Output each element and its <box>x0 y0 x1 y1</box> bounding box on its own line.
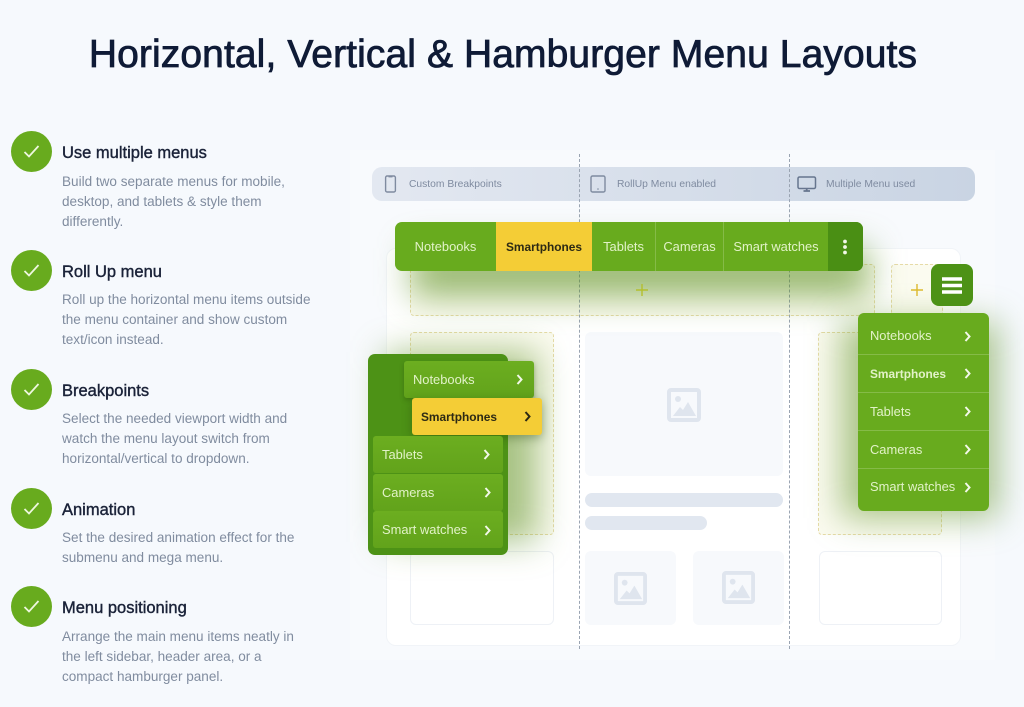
icon: small header plus <box>911 284 923 296</box>
icon: hamburger <box>942 277 962 294</box>
dropdown item: tablets: Tablets <box>870 404 911 419</box>
text: menu positioning: Arrange the main menu items neatly in <box>62 629 294 644</box>
card: bottom right empty <box>819 551 942 625</box>
icon: chevron <box>484 487 491 498</box>
icon: chevron <box>964 368 971 379</box>
title: Horizontal, Vertical & Hamburger Menu Layouts <box>89 33 917 76</box>
heading: roll up menu: Roll Up menu <box>62 263 162 281</box>
dropdown menu <box>858 313 989 511</box>
text: animation: submenu and mega menu. <box>62 550 223 565</box>
icon: monitor <box>797 176 816 192</box>
text: menu positioning: the left sidebar, header area, or a <box>62 649 262 664</box>
sidebar item: smart watches <box>373 511 503 548</box>
menu item: smartphones active: Smartphones <box>506 240 582 254</box>
heading: breakpoints: Breakpoints <box>62 382 149 400</box>
heading: animation: Animation <box>62 501 135 519</box>
text: use multiple menus <box>62 174 285 229</box>
heading: use multiple menus: Use multiple menus <box>62 144 207 162</box>
label: multiple menu used: Multiple Menu used <box>826 179 915 190</box>
menu item: smartphones active <box>496 222 592 271</box>
dropdown item: notebooks <box>858 313 989 355</box>
text: menu positioning <box>62 629 294 684</box>
icon: chevron <box>484 449 490 460</box>
shadow: horizontal menu <box>412 248 868 296</box>
icon: chevron <box>524 411 531 422</box>
dropdown item: cameras: Cameras <box>870 442 922 457</box>
card: image placeholder two <box>693 551 784 625</box>
text: roll up menu: Roll up the horizontal menu items outside <box>62 292 310 307</box>
text: animation: Set the desired animation effect for the <box>62 530 294 545</box>
sidebar item: notebooks: Notebooks <box>413 372 475 387</box>
sidebar item: tablets <box>373 436 503 473</box>
menu item: smart watches: Smart watches <box>733 239 819 254</box>
zone: right sidebar drop area <box>818 332 942 535</box>
sidebar item: smartphones active <box>412 398 542 435</box>
icon: image <box>722 571 755 604</box>
dropdown item: tablets <box>858 393 989 431</box>
icon: check circle <box>11 369 52 410</box>
menu item: notebooks: Notebooks <box>415 239 476 254</box>
breakpoint divider right <box>789 154 790 649</box>
text: roll up menu: the menu container and show custom <box>62 312 287 327</box>
icon: chevron <box>964 444 971 455</box>
zone: left sidebar drop area <box>410 332 554 535</box>
text: menu positioning: compact hamburger panel. <box>62 669 223 684</box>
panel: page wireframe <box>386 248 961 646</box>
zone: small header drop area <box>891 264 943 316</box>
menu item: smart watches <box>723 222 828 271</box>
icon: check circle <box>11 488 52 529</box>
feature: roll up menu <box>11 250 310 347</box>
label: rollup menu enabled: RollUp Menu enabled <box>617 179 716 190</box>
hamburger button <box>931 264 973 306</box>
icon: header plus <box>636 284 648 296</box>
shadow: dropdown menu <box>842 322 998 518</box>
icon: tablet <box>590 175 606 193</box>
icon: chevron <box>964 482 971 493</box>
feature: use multiple menus <box>11 131 285 229</box>
icon: chevron <box>964 406 971 417</box>
icon: phone <box>384 175 396 193</box>
icon: check circle <box>11 131 52 172</box>
icon: chevron <box>964 331 971 342</box>
dropdown item: notebooks: Notebooks <box>870 328 932 343</box>
sidebar item: tablets: Tablets <box>382 447 423 462</box>
dropdown item: smartphones: Smartphones <box>870 366 946 380</box>
icon: image <box>614 572 647 605</box>
text: breakpoints: Select the needed viewport width and <box>62 411 287 426</box>
text line placeholder long <box>585 493 783 507</box>
heading: menu positioning: Menu positioning <box>62 599 187 617</box>
text: roll up menu: text/icon instead. <box>62 332 164 347</box>
breakpoint bar <box>372 167 975 201</box>
diagram: menu layouts backdrop <box>350 150 995 660</box>
sidebar item: cameras <box>373 474 503 511</box>
label: custom breakpoints: Custom Breakpoints <box>409 179 502 190</box>
sidebar item: cameras: Cameras <box>382 485 434 500</box>
dropdown item: cameras <box>858 431 989 469</box>
text: roll up menu <box>62 292 310 347</box>
text: breakpoints: watch the menu layout switch from <box>62 431 270 446</box>
card: bottom left empty <box>410 551 554 625</box>
sidebar item: notebooks <box>404 361 534 398</box>
text: use multiple menus: desktop, and tablets & style them <box>62 194 262 209</box>
zone: header drop area <box>410 264 875 316</box>
panel: main image placeholder <box>585 332 783 476</box>
dropdown item: smart watches: Smart watches <box>870 479 955 494</box>
menu item: cameras: Cameras <box>663 239 716 254</box>
feature: breakpoints <box>11 369 287 466</box>
shadow: sidebar menu <box>385 352 537 542</box>
text line placeholder short <box>585 516 707 530</box>
icon: three dots <box>843 240 847 254</box>
text: use multiple menus: differently. <box>62 214 123 229</box>
dropdown item: smartphones <box>858 355 989 393</box>
menu item: cameras <box>655 222 723 271</box>
text: breakpoints: horizontal/vertical to dropdown. <box>62 451 250 466</box>
menu item: tablets: Tablets <box>603 239 644 254</box>
text: animation <box>62 530 294 565</box>
card: image placeholder one <box>585 551 676 625</box>
text: use multiple menus: Build two separate menus for mobile, <box>62 174 285 189</box>
feature: menu positioning <box>11 586 294 684</box>
sidebar item: smart watches: Smart watches <box>382 522 467 537</box>
vertical sidebar menu <box>368 354 508 555</box>
icon: check circle <box>11 586 52 627</box>
icon: chevron <box>484 525 491 536</box>
icon: check circle <box>11 250 52 291</box>
feature: animation <box>11 488 294 565</box>
breakpoint divider left <box>579 154 580 649</box>
more button <box>828 222 863 271</box>
icon: chevron <box>516 374 523 385</box>
sidebar item: smartphones active: Smartphones <box>421 410 497 424</box>
text: breakpoints <box>62 411 287 466</box>
icon: image <box>667 388 701 422</box>
horizontal menu <box>395 222 863 271</box>
